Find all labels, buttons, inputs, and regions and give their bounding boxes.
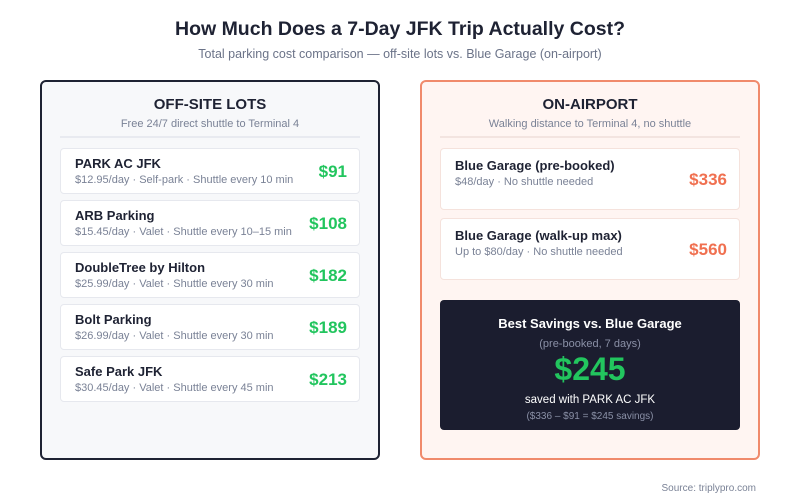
heading: on-airport: ON-AIRPORT: [542, 96, 638, 113]
panel: off-site lots: [40, 80, 380, 460]
card: Blue Garage walk-up: [440, 218, 740, 280]
card: DoubleTree: $182: [309, 266, 347, 285]
callout: best savings: Best Savings vs. Blue Garage: [498, 316, 682, 331]
card: Bolt Parking: [60, 304, 360, 350]
card: DoubleTree: [60, 252, 360, 298]
card: DoubleTree: $25.99/day · Valet · Shuttle every 30 min: [75, 278, 274, 290]
panel: on-airport: [420, 80, 760, 460]
card: Blue Garage pre-booked: [440, 148, 740, 210]
card: Blue Garage walk-up: Up to $80/day · No shuttle needed: [455, 246, 623, 258]
card: ARB Parking: $15.45/day · Valet · Shuttle every 10–15 min: [75, 226, 292, 238]
card: PARK AC JFK: PARK AC JFK: [75, 156, 161, 171]
title: How Much Does a 7-Day JFK Trip Actually Cost?: [175, 18, 625, 40]
card: Bolt Parking: $189: [309, 318, 347, 337]
card: Bolt Parking: $26.99/day · Valet · Shuttle every 30 min: [75, 330, 274, 342]
card: PARK AC JFK: $12.95/day · Self-park · Shuttle every 10 min: [75, 174, 293, 186]
callout: best savings: saved with PARK AC JFK: [525, 394, 655, 406]
card: ARB Parking: [60, 200, 360, 246]
card: Safe Park JFK: $213: [309, 370, 347, 389]
card: ARB Parking: ARB Parking: [75, 208, 154, 223]
card: Blue Garage pre-booked: $336: [689, 170, 727, 189]
heading: off-site: OFF-SITE LOTS: [154, 96, 266, 113]
card: Safe Park JFK: [60, 356, 360, 402]
card: Blue Garage pre-booked: Blue Garage (pre-booked): [455, 158, 615, 173]
callout: best savings: $245: [554, 351, 626, 387]
subtitle: Total parking cost comparison — off-site lots vs. Blue Garage (on-airport): [198, 47, 602, 61]
callout: best savings: (pre-booked, 7 days): [539, 338, 641, 350]
callout: best savings: ($336 – $91 = $245 savings): [526, 411, 654, 422]
card: Bolt Parking: Bolt Parking: [75, 312, 152, 327]
card: DoubleTree: DoubleTree by Hilton: [75, 260, 205, 275]
card: Blue Garage walk-up: $560: [689, 240, 727, 259]
card: PARK AC JFK: [60, 148, 360, 194]
card: Blue Garage walk-up: Blue Garage (walk-up max): [455, 228, 622, 243]
card: ARB Parking: $108: [309, 214, 347, 233]
subheading: off-site: Free 24/7 direct shuttle to Terminal 4: [121, 118, 299, 130]
callout: best savings: [440, 300, 740, 430]
card: PARK AC JFK: $91: [319, 162, 347, 181]
source: Source: triplypro.com: [662, 483, 756, 494]
subheading: on-airport: Walking distance to Terminal 4, no shuttle: [489, 118, 691, 130]
card: Blue Garage pre-booked: $48/day · No shuttle needed: [455, 176, 593, 188]
card: Safe Park JFK: $30.45/day · Valet · Shuttle every 45 min: [75, 382, 274, 394]
card: Safe Park JFK: Safe Park JFK: [75, 364, 162, 379]
